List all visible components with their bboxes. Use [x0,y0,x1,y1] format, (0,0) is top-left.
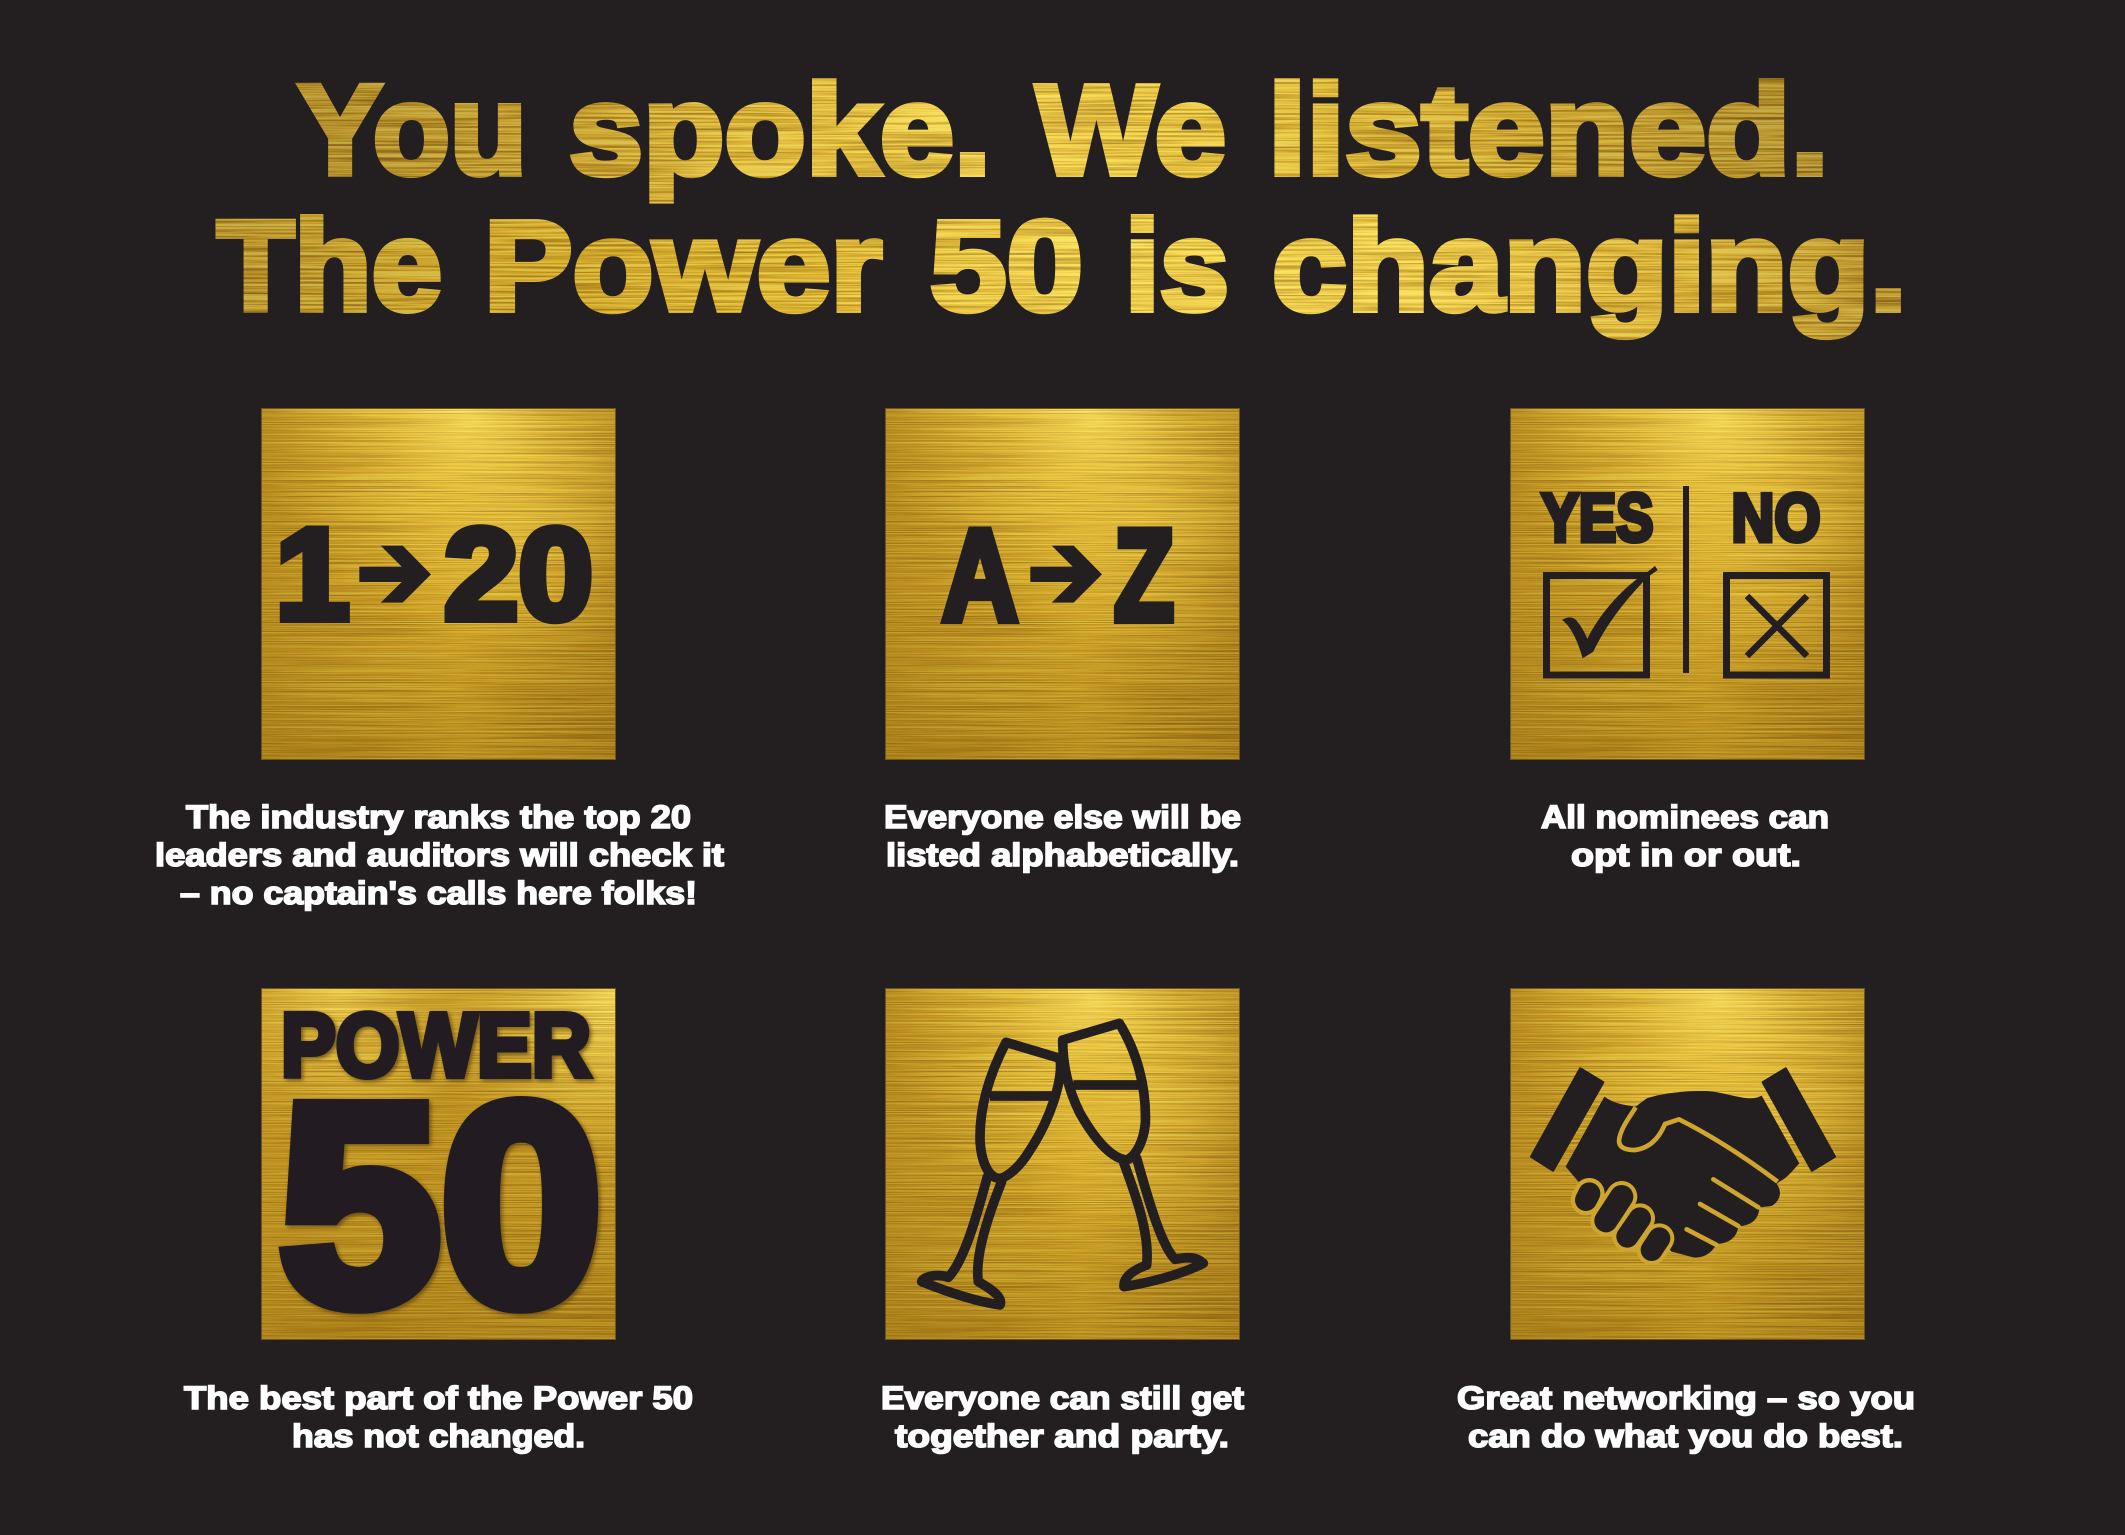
title: Power [484,195,882,338]
caption: top 20: leaders and auditors will check it [155,837,724,873]
caption: party [881,1380,1244,1454]
icon: 1 arrow 20: 1 [276,501,350,647]
icon: A arrow Z [942,502,1174,648]
caption: alphabetical: listed alphabetically. [886,837,1239,873]
caption: best part [184,1380,693,1454]
panel: Power 50 logo [261,988,616,1364]
caption: opt in or out: All nominees can [1541,799,1829,835]
caption: alphabetical: Everyone else will be [884,799,1241,835]
panel: party [885,988,1240,1340]
icon: checked box [1546,566,1658,675]
logo: POWER 50: 50 [279,1046,602,1364]
text: YES: YES [1542,480,1654,556]
caption: top 20: – no captain's calls here folks! [180,875,697,911]
caption: party: Everyone can still get [881,1380,1244,1416]
panel: 1 to 20 [261,408,616,760]
title [217,59,1907,338]
icon: 1 arrow 20: 20 [444,501,593,647]
panel: A to Z [885,408,1240,760]
title: We [1036,59,1226,202]
title: is [1125,195,1229,338]
title: You [298,59,527,202]
logo: POWER 50: POWER [281,996,591,1096]
icon: A arrow Z: Z [1114,502,1174,648]
title: The [217,195,442,338]
caption: networking: can do what you do best. [1468,1418,1903,1454]
title: changing. [1272,195,1907,338]
icon: crossed box [1726,576,1826,675]
title: spoke. [569,59,991,202]
title: listened. [1268,59,1829,202]
caption: opt in or out [1541,799,1829,873]
icon: 1 arrow 20 [276,501,593,647]
panel: networking [1510,988,1865,1340]
caption: best part: has not changed. [292,1418,585,1454]
icon: handshake [1531,1069,1835,1257]
caption: best part: The best part of the Power 50 [184,1380,693,1416]
divider [1683,486,1689,673]
title: 50 [930,195,1083,338]
icon: champagne glasses [922,1023,1203,1305]
caption: networking [1457,1380,1915,1454]
text: NO: NO [1732,480,1820,556]
caption: opt in or out: opt in or out. [1571,837,1801,873]
caption: networking: Great networking – so you [1457,1380,1915,1416]
caption: top 20: The industry ranks the top 20 [186,799,691,835]
panel: yes or no [1510,408,1865,760]
icon: A arrow Z: A [942,502,1018,648]
caption: alphabetical [884,799,1241,873]
caption: top 20 [155,799,724,911]
caption: party: together and party. [895,1418,1229,1454]
